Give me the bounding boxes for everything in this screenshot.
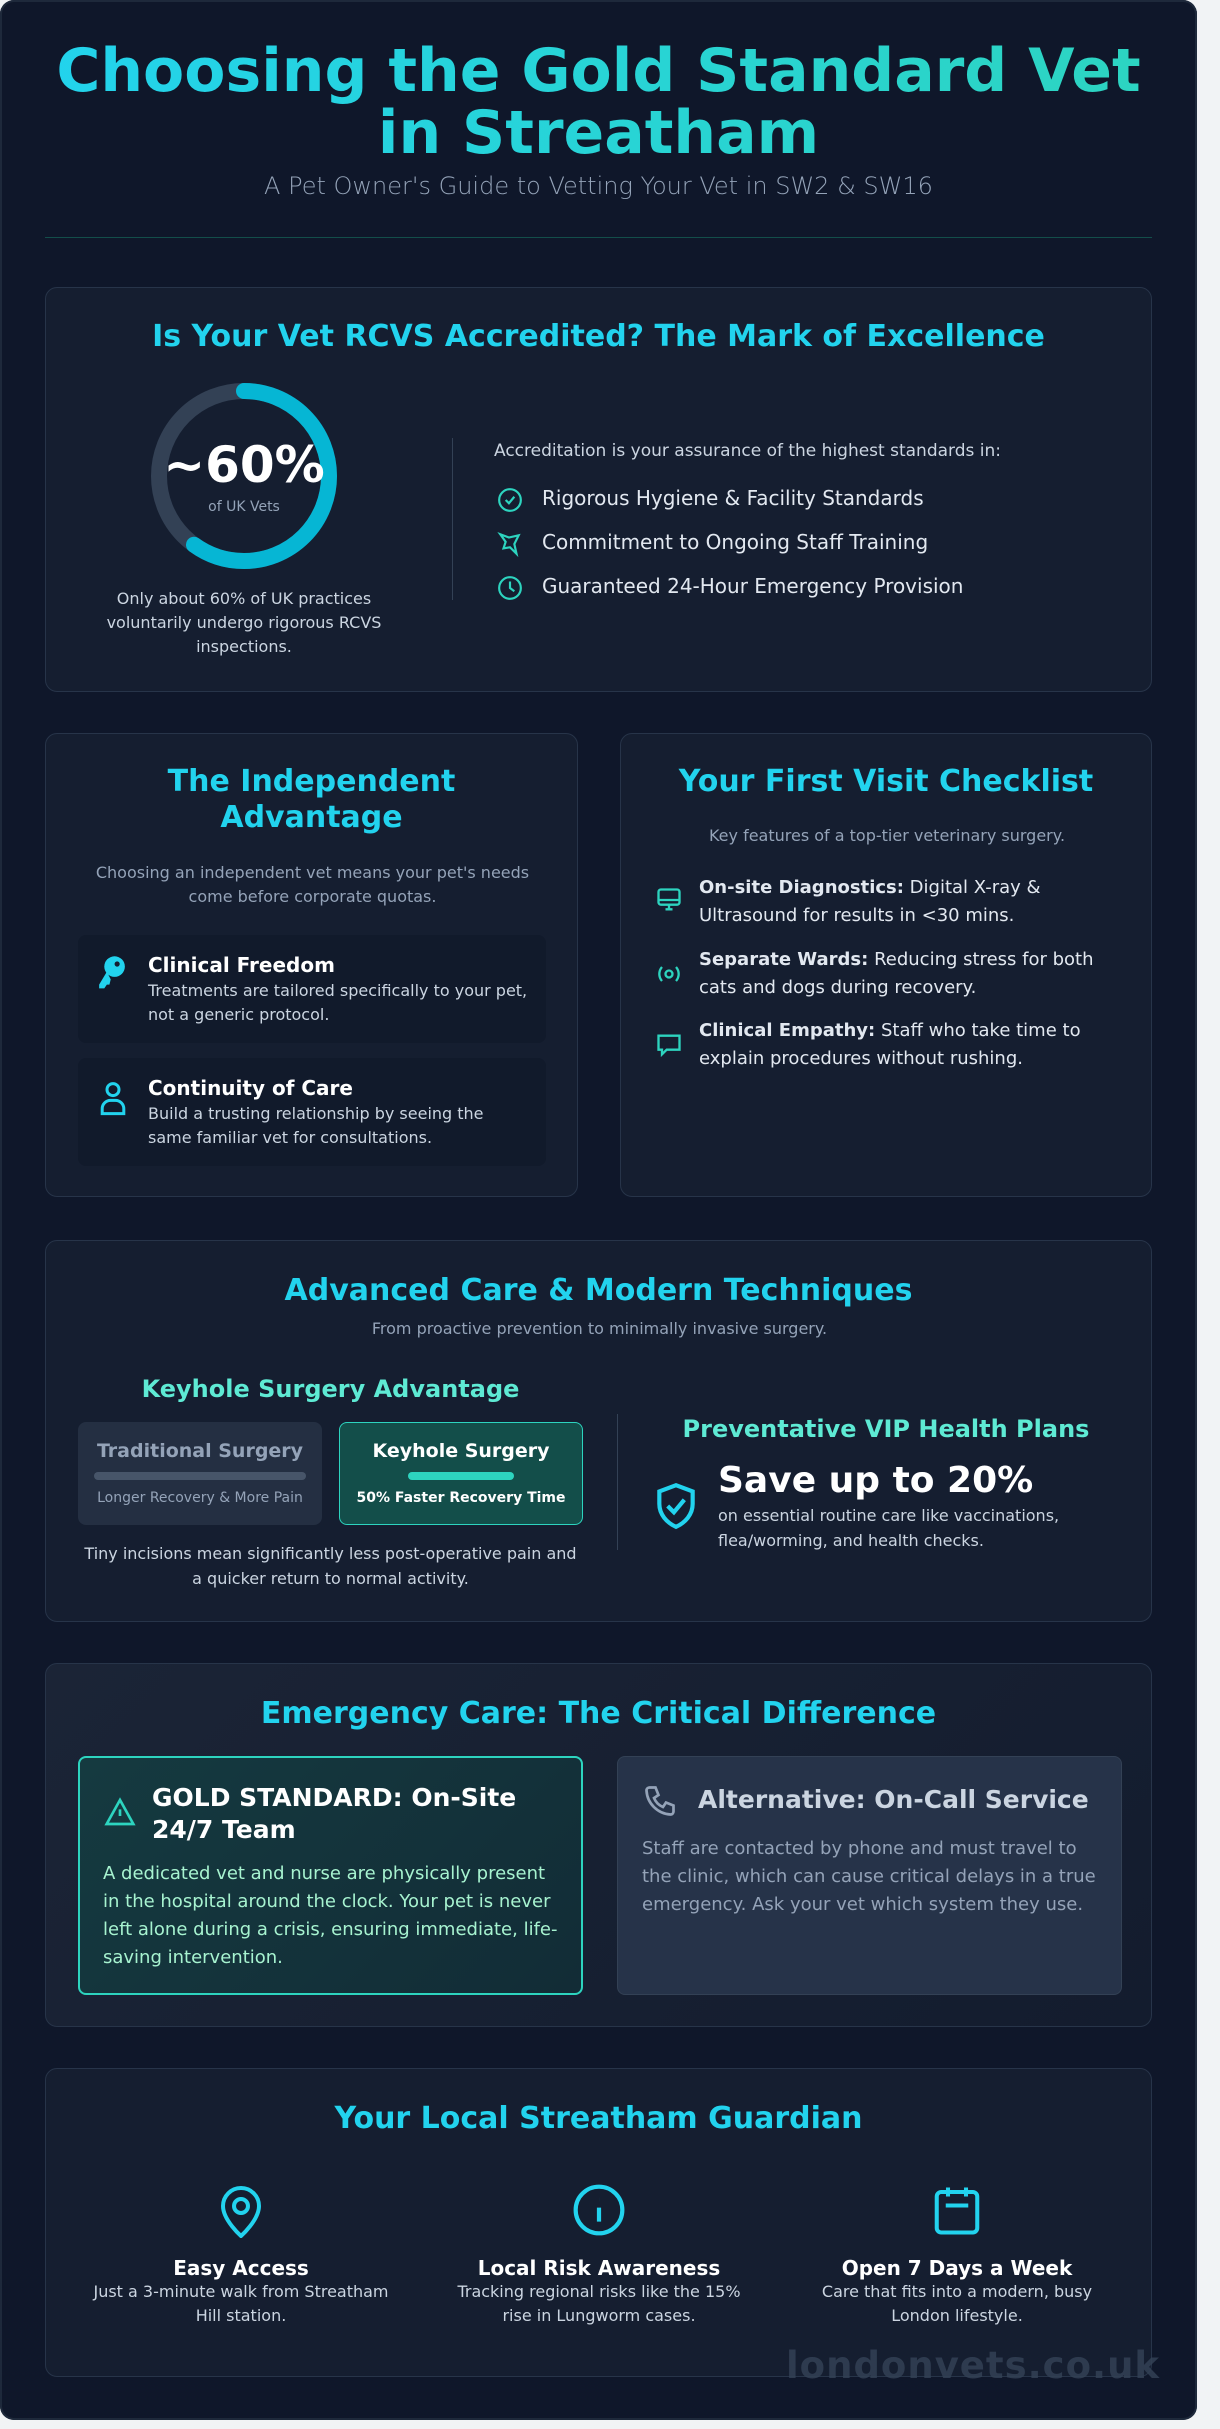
card: gold standard: [78, 1756, 583, 1995]
item: clinical empathy: [657, 1020, 1081, 1069]
feature: open 7 days: Care that fits into a modern, busy London lifestyle.: [822, 2282, 1092, 2325]
stat: save 20%: Save up to 20%: [718, 1460, 1033, 1501]
box: keyhole surgery: 50% Faster Recovery Time: [356, 1490, 566, 1506]
card: on-call alternative: Staff are contacted by phone and must travel to the clinic, which can cause critical delays in a true emergency. Ask your vet which system they use.: [642, 1838, 1096, 1915]
donut chart: of UK Vets: [208, 499, 280, 515]
feature: open 7 days: [822, 2188, 1092, 2325]
box: traditional surgery: Traditional Surgery: [97, 1440, 303, 1462]
description: Choosing an independent vet means your pet's needs come before corporate quotas.: [96, 863, 529, 906]
list: standards: [494, 441, 1001, 600]
box: keyhole surgery: Keyhole Surgery: [372, 1440, 550, 1462]
item: separate wards: [658, 949, 1094, 998]
heading: Your Local Streatham Guardian: [334, 2101, 863, 2136]
heading: Is Your Vet RCVS Accredited? The Mark of Excellence: [152, 319, 1045, 354]
panel: first visit checklist: Clinical Empathy: Staff who take time to explain procedures without rushing.: [699, 1020, 1081, 1069]
heading: Advanced Care & Modern Techniques: [285, 1273, 912, 1308]
feature: local risk awareness: Local Risk Awareness: [478, 2256, 720, 2280]
feature: local risk awareness: Tracking regional risks like the 15% rise in Lungworm cases.: [457, 2282, 741, 2325]
card: clinical freedom: Clinical Freedom: [148, 953, 335, 977]
feature: easy access: Just a 3-minute walk from Streatham Hill station.: [93, 2282, 389, 2325]
item: hygiene: Rigorous Hygiene & Facility Standards: [542, 486, 924, 510]
feature: easy access: [92, 2186, 389, 2325]
box: keyhole surgery: [339, 1422, 583, 1525]
caption: Only about 60% of UK practices voluntarily undergo rigorous RCVS inspections.: [107, 589, 381, 656]
panel: first visit checklist: On-site Diagnostics: Digital X-ray & Ultrasound for results in <30 mins.: [699, 877, 1041, 926]
subheading: VIP plans: Preventative VIP Health Plans: [683, 1415, 1089, 1443]
subtitle: From proactive prevention to minimally invasive surgery.: [372, 1319, 827, 1338]
heading: Emergency Care: The Critical Difference: [261, 1696, 936, 1731]
item: emergency: Guaranteed 24-Hour Emergency Provision: [542, 574, 963, 598]
heading: Your First Visit Checklist: [679, 764, 1093, 799]
card: gold standard: A dedicated vet and nurse are physically present in the hospital around the clock. Your pet is never left alone during a crisis, ensuring immediate, life-saving intervention.: [103, 1863, 557, 1968]
item: training: Commitment to Ongoing Staff Training: [542, 530, 928, 554]
heading: Advantage: [220, 800, 403, 835]
panel: independent advantage: [45, 733, 578, 1197]
watermark: londonvets.co.uk: [786, 2344, 1160, 2387]
card: continuity of care: Build a trusting relationship by seeing the same familiar vet for consultations.: [148, 1104, 484, 1147]
heading: [168, 764, 455, 835]
icon: shield: [657, 1483, 695, 1530]
panel: emergency care: [45, 1663, 1152, 2027]
subtitle: Key features of a top-tier veterinary surgery.: [709, 826, 1065, 845]
feature: local risk awareness: [457, 2184, 741, 2325]
donut chart: [151, 383, 337, 569]
card: continuity of care: [78, 1058, 546, 1166]
donut chart: ~60%: [163, 436, 325, 494]
card: clinical freedom: Treatments are tailored specifically to your pet, not a generic protocol.: [148, 981, 527, 1024]
panel: first visit checklist: Separate Wards: Reducing stress for both cats and dogs during recovery.: [699, 949, 1094, 998]
card: on-call alternative: [617, 1756, 1122, 1995]
card: clinical freedom: [78, 935, 546, 1043]
feature: easy access: Easy Access: [173, 2256, 309, 2280]
title: in Streatham: [378, 98, 819, 168]
panel: advanced care: [45, 1240, 1152, 1622]
panel: RCVS accreditation: [45, 287, 1152, 692]
card: continuity of care: Continuity of Care: [148, 1076, 353, 1100]
stat: save 20%: [718, 1460, 1059, 1550]
subtitle: A Pet Owner's Guide to Vetting Your Vet in SW2 & SW16: [264, 172, 933, 200]
panel: local guardian: [45, 2068, 1152, 2377]
item: diagnostics: [657, 877, 1041, 926]
heading: The Independent: [168, 764, 455, 799]
title: [0, 40, 1197, 164]
subheading: keyhole: Keyhole Surgery Advantage: [142, 1375, 519, 1403]
title: Choosing the Gold Standard Vet: [56, 36, 1141, 106]
list: standards: Accreditation is your assurance of the highest standards in:: [494, 441, 1001, 461]
stat: save 20%: on essential routine care like vaccinations, flea/worming, and health checks.: [718, 1506, 1059, 1550]
box: traditional surgery: Longer Recovery & More Pain: [97, 1490, 303, 1506]
caption: Tiny incisions mean significantly less post-operative pain and a quicker return to normal activity.: [84, 1544, 577, 1588]
card: gold standard: GOLD STANDARD: On-Site 24/7 Team: [152, 1783, 516, 1844]
feature: open 7 days: Open 7 Days a Week: [842, 2256, 1072, 2280]
panel: first visit checklist: [620, 733, 1152, 1197]
card: on-call alternative: Alternative: On-Call Service: [698, 1785, 1089, 1814]
box: traditional surgery: [78, 1422, 322, 1525]
